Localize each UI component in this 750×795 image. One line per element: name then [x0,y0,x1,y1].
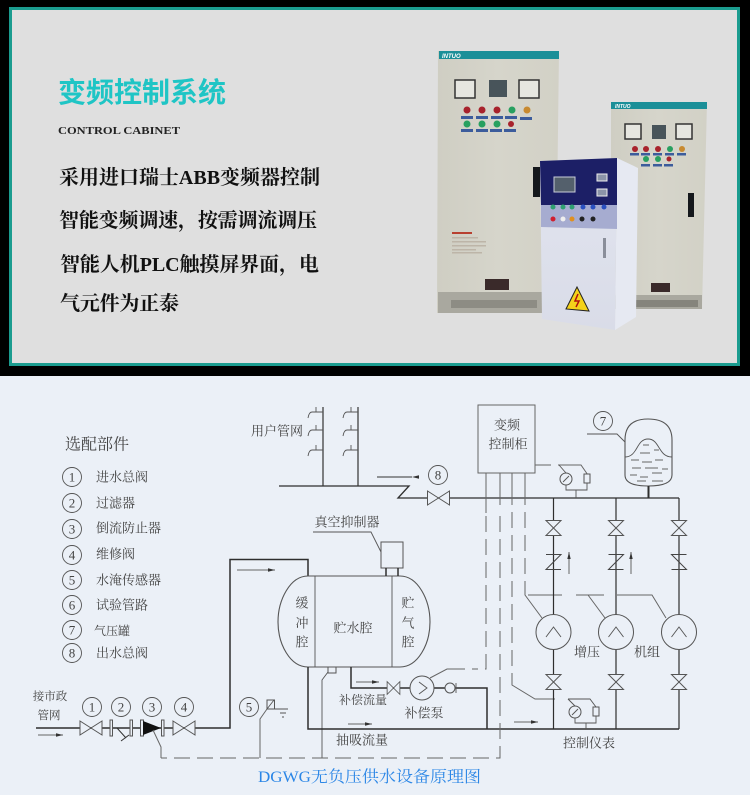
user pipe network: 用户管网 [251,424,303,438]
feature text: 采用进口瑞士ABB变频器控制 [59,165,320,189]
left cabinet [437,51,559,313]
subtitle: CONTROL CABINET [58,126,180,137]
legend: optional parts: 1 [69,470,75,484]
legend: optional parts: 水淹传感器 [96,572,161,588]
user pipe network [251,407,679,505]
inlet pipe and fittings: 2 [118,700,124,714]
legend: optional parts: 7 [69,622,76,638]
right cabinet [611,102,707,309]
tank: 冲 [295,616,309,630]
vacuum suppressor [313,514,403,576]
right cabinet: INTUO [615,104,631,110]
diagram caption: DGWG无负压供水设备原理图 [258,768,481,786]
control instruments: 控制仪表 [563,736,615,750]
control lines [153,465,666,758]
legend: optional parts: 5 [69,572,75,588]
legend: optional parts: 过滤器 [96,496,135,510]
feature text: 智能人机PLC触摸屏界面，电 [60,253,319,276]
pressure tank [587,412,672,498]
left cabinet: INTUO [442,54,461,60]
feature text: 气元件为正泰 [60,292,179,315]
control cabinet box: 控制柜 [488,436,528,452]
inlet pipe and fittings: 1 [89,700,95,714]
legend: optional parts: 4 [69,548,76,562]
icon: high-voltage warning [566,287,589,311]
legend: optional parts: 试验管路 [96,598,148,612]
inlet pipe and fittings: 3 [149,700,155,714]
tank sensor [322,672,328,758]
legend: optional parts [62,436,161,662]
tank: 气 [401,616,415,630]
front cabinet [540,158,638,330]
inlet pipe and fittings: 管网 [38,708,60,722]
booster pump branches [536,498,696,729]
legend: optional parts: 进水总阀 [96,470,148,484]
tank: 缓 [295,596,309,610]
legend: optional parts: 倒流防止器 [96,520,161,536]
user pipe network: 8 [435,468,441,482]
booster pump branches: 机组 [634,644,660,660]
inlet pipe and fittings: 接市政 [33,689,68,703]
control instruments [559,465,615,750]
tank [278,514,430,758]
legend: optional parts: 2 [69,496,75,510]
legend: optional parts: 选配部件 [65,436,129,454]
legend: optional parts: 出水总阀 [96,646,148,660]
compensation loop: 补偿流量 [339,692,387,707]
legend: optional parts: 3 [69,522,75,536]
inlet pipe and fittings: 4 [181,700,188,714]
compensation loop: 补偿泵 [404,706,444,720]
tank: 腔 [401,634,415,650]
control cabinet box: 变频 [494,418,521,432]
control cabinet box [478,405,535,473]
panel: control cabinet [10,8,738,364]
tank: 贮 [401,596,415,610]
legend: optional parts: 6 [69,598,76,612]
panel: schematic diagram [0,376,750,795]
tank: 腔 [295,634,309,650]
feature text [59,165,320,315]
product photo: cabinets [437,51,707,330]
legend: optional parts: 气压罐 [94,623,130,638]
black page background [0,0,750,376]
compensation loop: 抽吸流量 [336,732,388,748]
vacuum suppressor: 真空抑制器 [314,514,380,530]
title: 变频控制系统 [58,77,226,108]
legend: optional parts: 8 [69,646,75,660]
legend: optional parts: 维修阀 [96,546,135,562]
inlet pipe and fittings: 5 [246,700,252,714]
pressure tank: 7 [600,414,607,428]
booster pump branches: 增压 [574,644,600,660]
sensor 5 [267,700,288,717]
tank: 贮水腔 [333,620,373,636]
inlet pipe and fittings [33,560,308,741]
compensation loop [308,667,679,748]
feature text: 智能变频调速，按需调流调压 [59,208,317,232]
